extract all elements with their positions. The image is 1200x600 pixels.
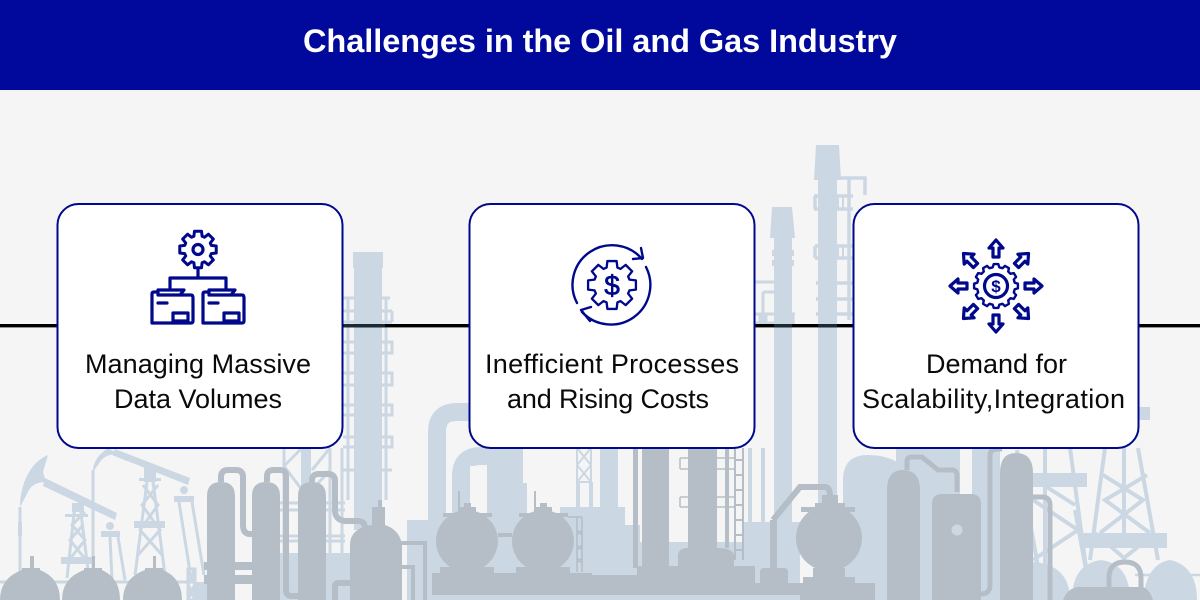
label 1: Managing Massive (85, 349, 311, 379)
short pump on band (760, 520, 788, 583)
gas holder behind columns (843, 455, 897, 600)
low block behind tank (280, 553, 362, 600)
label 3: Scalability,Integration (862, 384, 1125, 414)
small bottom tank with arch (1063, 587, 1153, 600)
dollar sign: $ (604, 270, 620, 301)
panel: managing massive data volumes (58, 204, 342, 448)
card 2 (470, 204, 754, 448)
tall stack centre-left (353, 252, 383, 530)
gear (588, 261, 636, 309)
arm to short tower (755, 282, 795, 323)
icon: gear with folders (152, 231, 244, 323)
cycle arcs (573, 245, 650, 325)
arch pipe (1109, 562, 1141, 590)
gear (180, 231, 216, 268)
building behind column (896, 448, 960, 600)
second pipe arc (461, 456, 495, 530)
stack side rails (680, 458, 735, 507)
gear hub (193, 244, 203, 254)
tank right of columns (350, 500, 402, 600)
right sphere tank (796, 495, 862, 571)
rear derrick (1017, 448, 1087, 600)
sphere caps and rails (443, 491, 568, 517)
gallery bars (822, 196, 843, 258)
right refinery block (743, 522, 800, 600)
central block and column (560, 448, 760, 600)
illustration: refinery skyline (0, 145, 1200, 600)
folder left (152, 290, 193, 323)
label 2: Inefficient Processes (485, 349, 739, 379)
dark skyline: foreground plant (0, 448, 1153, 600)
tall top-hat tower (814, 145, 841, 525)
sphere tanks centre (436, 510, 574, 572)
card 3 (854, 204, 1138, 448)
arrows (950, 240, 1042, 332)
lattice behind second card (577, 448, 591, 482)
icon: cycle gear with dollar (573, 245, 650, 325)
stack galleries (343, 298, 392, 500)
thin stack pipe (633, 448, 638, 568)
label 1: Data Volumes (114, 384, 282, 414)
short tower collars (772, 250, 794, 266)
rail right (1135, 574, 1200, 576)
panel: demand for scalability, integration (854, 204, 1138, 448)
distillation columns (207, 482, 326, 600)
light skyline: distant structures (0, 145, 1200, 600)
tall lattice (735, 448, 743, 560)
label 2: and Rising Costs (507, 384, 709, 414)
column connectors (204, 562, 252, 584)
lattice by sphere (568, 517, 582, 572)
black horizontal line (0, 324, 1200, 327)
tall tower galleries (814, 178, 865, 320)
right sphere base (800, 568, 875, 600)
lattice legs behind columns (280, 448, 345, 555)
column porthole (952, 524, 962, 536)
central stacks (637, 448, 800, 595)
large pipe arc (437, 412, 475, 530)
refinery building blocks (407, 448, 640, 600)
pump jack right (93, 448, 204, 575)
tower left behind column (818, 448, 837, 598)
bent pipe (773, 487, 830, 520)
spherical tanks left (0, 556, 182, 600)
header band (0, 0, 1200, 90)
small frame pipes (400, 543, 425, 600)
long base platform (432, 567, 640, 595)
panel: inefficient processes and rising costs (470, 204, 754, 448)
icon: gear with radiating arrows (950, 240, 1042, 332)
distant spheres (1033, 560, 1197, 600)
flag of front derrick (1139, 407, 1150, 420)
right pipes (907, 449, 1050, 600)
small white pipe gap (470, 466, 487, 504)
coin (984, 274, 1008, 298)
column pipes (221, 470, 365, 600)
folder right (203, 290, 244, 323)
tower behind first card (301, 448, 311, 500)
central gear (974, 264, 1018, 308)
title: Challenges in the Oil and Gas Industry (303, 23, 897, 59)
front derrick (1090, 448, 1158, 560)
pump jack left (18, 455, 125, 580)
block beside lattice (195, 582, 213, 600)
right columns (887, 453, 1033, 600)
connector tree (170, 269, 226, 288)
thin verticals (578, 448, 763, 525)
sphere connector (498, 533, 512, 537)
rail and lattice far left (0, 569, 195, 600)
label 3: Demand for (926, 349, 1067, 379)
short top-hat tower (770, 207, 795, 525)
dollar sign small: $ (991, 277, 1001, 296)
card 1 (58, 204, 342, 448)
